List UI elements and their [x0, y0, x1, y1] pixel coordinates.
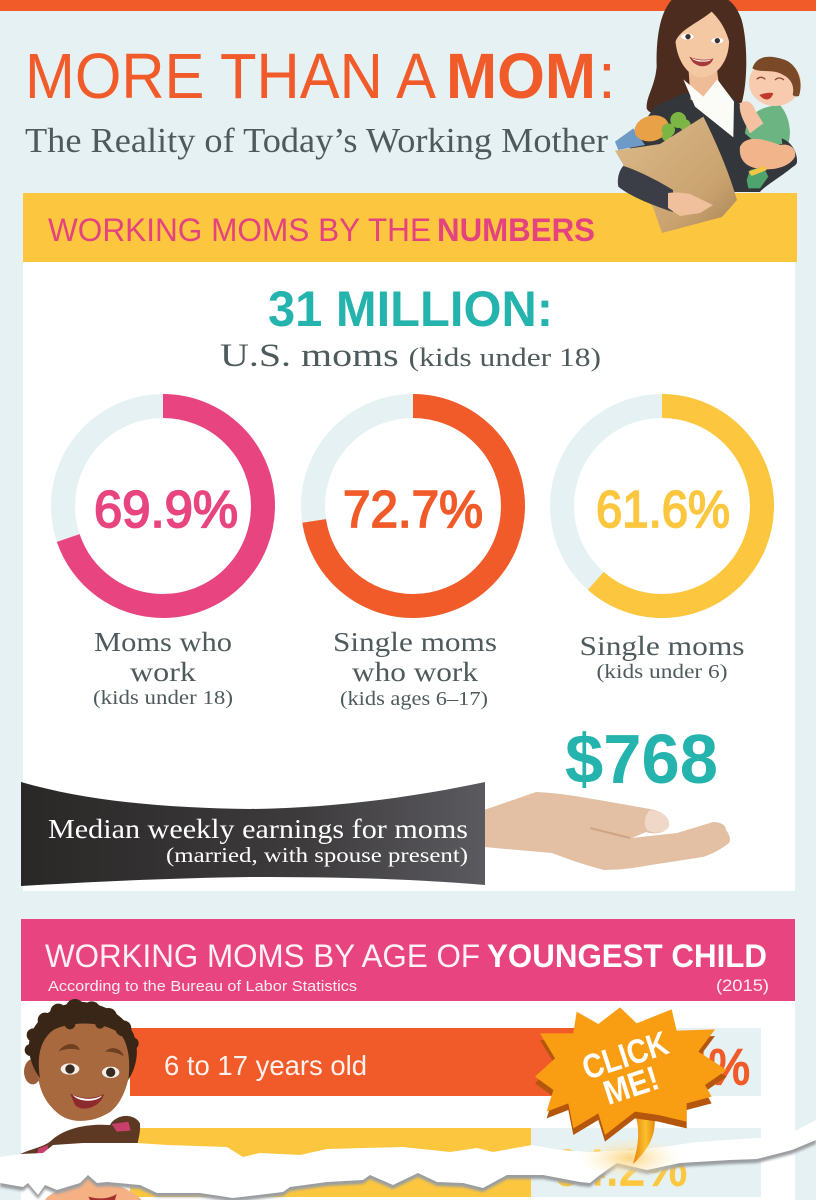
title emphasis: MOM	[446, 40, 596, 112]
label: single moms kids under 6: Single moms	[580, 631, 744, 661]
sleeve banner: median weekly earnings: (married, with spouse present)	[166, 843, 468, 867]
icon: open hand	[484, 792, 730, 870]
illustration: boy face	[24, 999, 139, 1121]
bar: 6 to 17 years old: 74.4%	[618, 1039, 750, 1095]
section header: by age of youngest child: According to the Bureau of Labor Statistics	[48, 978, 357, 995]
sleeve banner: median weekly earnings	[21, 782, 485, 886]
bar: 6 to 17 years old: 6 to 17 years old	[164, 1050, 367, 1081]
top orange bar	[0, 0, 816, 11]
title colon: :	[598, 40, 616, 112]
torn paper strip	[0, 1120, 816, 1200]
subtitle: The Reality of Today’s Working Mother	[25, 121, 608, 160]
panel: age of youngest child	[21, 1001, 795, 1200]
subheading: U.S. moms: U.S. moms (kids under 18)	[220, 338, 601, 374]
donut: single moms kids under 6: 61.6%	[596, 481, 730, 539]
label: moms who work: work	[130, 657, 197, 687]
click me badge: ME!	[599, 1059, 664, 1113]
sleeve banner: median weekly earnings: Median weekly earnings for moms	[48, 814, 468, 844]
click me badge	[535, 1007, 727, 1180]
section header: by age of youngest child: YOUNGEST CHILD	[487, 938, 767, 974]
click me badge: CLICK	[578, 1024, 673, 1088]
label: moms who work: (kids under 18)	[93, 687, 233, 709]
earnings amount: $768	[565, 720, 718, 798]
label: single moms kids under 6: (kids under 6)	[596, 661, 728, 683]
section header: by age of youngest child	[21, 919, 795, 1001]
illustration: child with pigtails	[20, 1116, 140, 1160]
section header: working moms by the numbers	[23, 193, 797, 262]
label: single moms who work: (kids ages 6–17)	[340, 688, 488, 710]
donut: single moms kids under 6	[562, 406, 762, 606]
title: MORE THAN A	[25, 40, 436, 112]
label: moms who work: Moms who	[94, 627, 232, 657]
big number: 31 million: 31 MILLION:	[268, 281, 553, 337]
panel: numbers	[23, 262, 795, 891]
bar: under 6	[130, 1128, 761, 1197]
section header: working moms by the numbers: NUMBERS	[437, 212, 595, 248]
label: single moms who work	[333, 627, 497, 710]
donut: single moms who work	[313, 406, 513, 606]
donut: moms who work: 69.9%	[94, 481, 238, 539]
donut: moms who work	[63, 406, 263, 606]
section header: by age of youngest child: WORKING MOMS BY AGE OF	[45, 938, 480, 974]
illustration: mother with baby and groceries	[615, 0, 801, 233]
bar: 6 to 17 years old	[130, 1028, 761, 1096]
section header: working moms by the numbers: WORKING MOMS BY THE	[48, 212, 431, 248]
illustration: child below tear	[45, 1175, 142, 1200]
donut: single moms who work: 72.7%	[343, 481, 483, 539]
label: single moms who work: who work	[352, 657, 479, 687]
bar: under 6: 64.2%	[553, 1140, 687, 1196]
label: single moms who work: Single moms	[333, 627, 497, 657]
label: single moms kids under 6	[580, 631, 744, 683]
section header: by age of youngest child: (2015)	[716, 976, 769, 995]
label: moms who work	[93, 627, 233, 709]
